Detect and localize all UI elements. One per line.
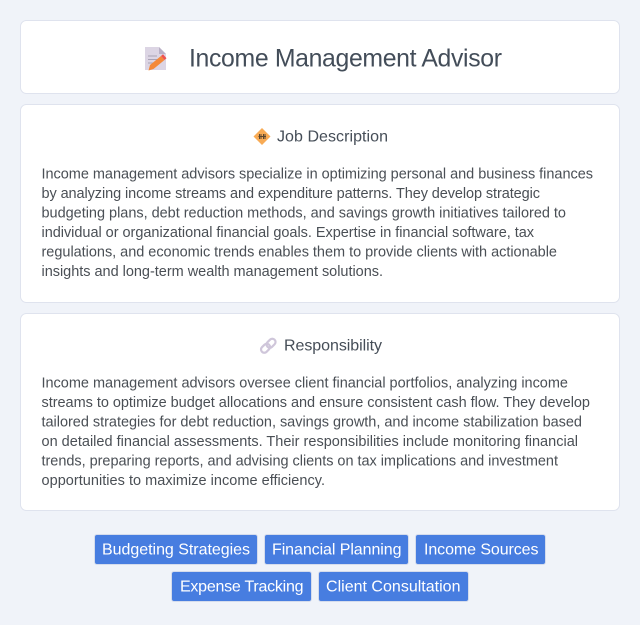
tag: financial planning: Financial Planning <box>272 542 402 558</box>
text block: job description: by analyzing income streams and expenditure patterns. They develop strategic <box>42 186 540 202</box>
text block: responsibility: on detailed financial assessments. Their responsibilities include monitoring financial <box>42 434 578 450</box>
tag: expense tracking <box>172 572 312 602</box>
text block: job description: regulations, and economic trends enables them to provide clients with actionable <box>42 244 557 260</box>
tag: client consultation <box>318 572 468 602</box>
text block: responsibility <box>42 375 590 489</box>
tag: expense tracking: Expense Tracking <box>180 578 304 596</box>
heading: job description: Job Description <box>277 128 388 146</box>
text block: responsibility: Income management advisors oversee client financial portfolios, analyzing income <box>42 375 568 391</box>
text block: job description: budgeting plans, debt reduction methods, and savings growth initiatives tailored to <box>42 205 566 221</box>
panel: title header <box>20 20 620 94</box>
text block: job description: Income management advisors specialize in optimizing personal and business finances <box>42 166 593 182</box>
text block: responsibility: trends, preparing reports, and advising clients on tax implications and investment <box>42 453 558 469</box>
icon: document with pencil <box>145 47 166 70</box>
tag: client consultation: Client Consultation <box>326 578 460 596</box>
heading: responsibility: Responsibility <box>284 338 382 354</box>
text block: responsibility: tailored strategies for debt reduction, savings growth, and income stabilization based <box>42 414 582 430</box>
title: Income Management Advisor <box>189 46 502 72</box>
tag: budgeting strategies: Budgeting Strategies <box>102 542 250 558</box>
text block: responsibility: streams to optimize budget allocations and ensure consistent cash flow. They develop <box>42 395 590 411</box>
tag: income sources <box>416 534 546 564</box>
text block: responsibility: opportunities to maximize income efficiency. <box>42 473 325 489</box>
text block: job description: insights and long-term wealth management solutions. <box>42 264 383 280</box>
icon: diamond sign <box>254 128 270 145</box>
panel: job description <box>20 104 620 302</box>
text block: job description <box>42 166 593 280</box>
text block: job description: individual or organizational financial goals. Expertise in financial software, tax <box>42 225 535 241</box>
tags <box>94 534 546 602</box>
tag: income sources: Income Sources <box>424 542 538 558</box>
tag: budgeting strategies <box>94 534 258 564</box>
icon: chain link <box>260 337 277 354</box>
tag: financial planning <box>264 534 408 564</box>
panel: responsibility <box>20 314 620 510</box>
